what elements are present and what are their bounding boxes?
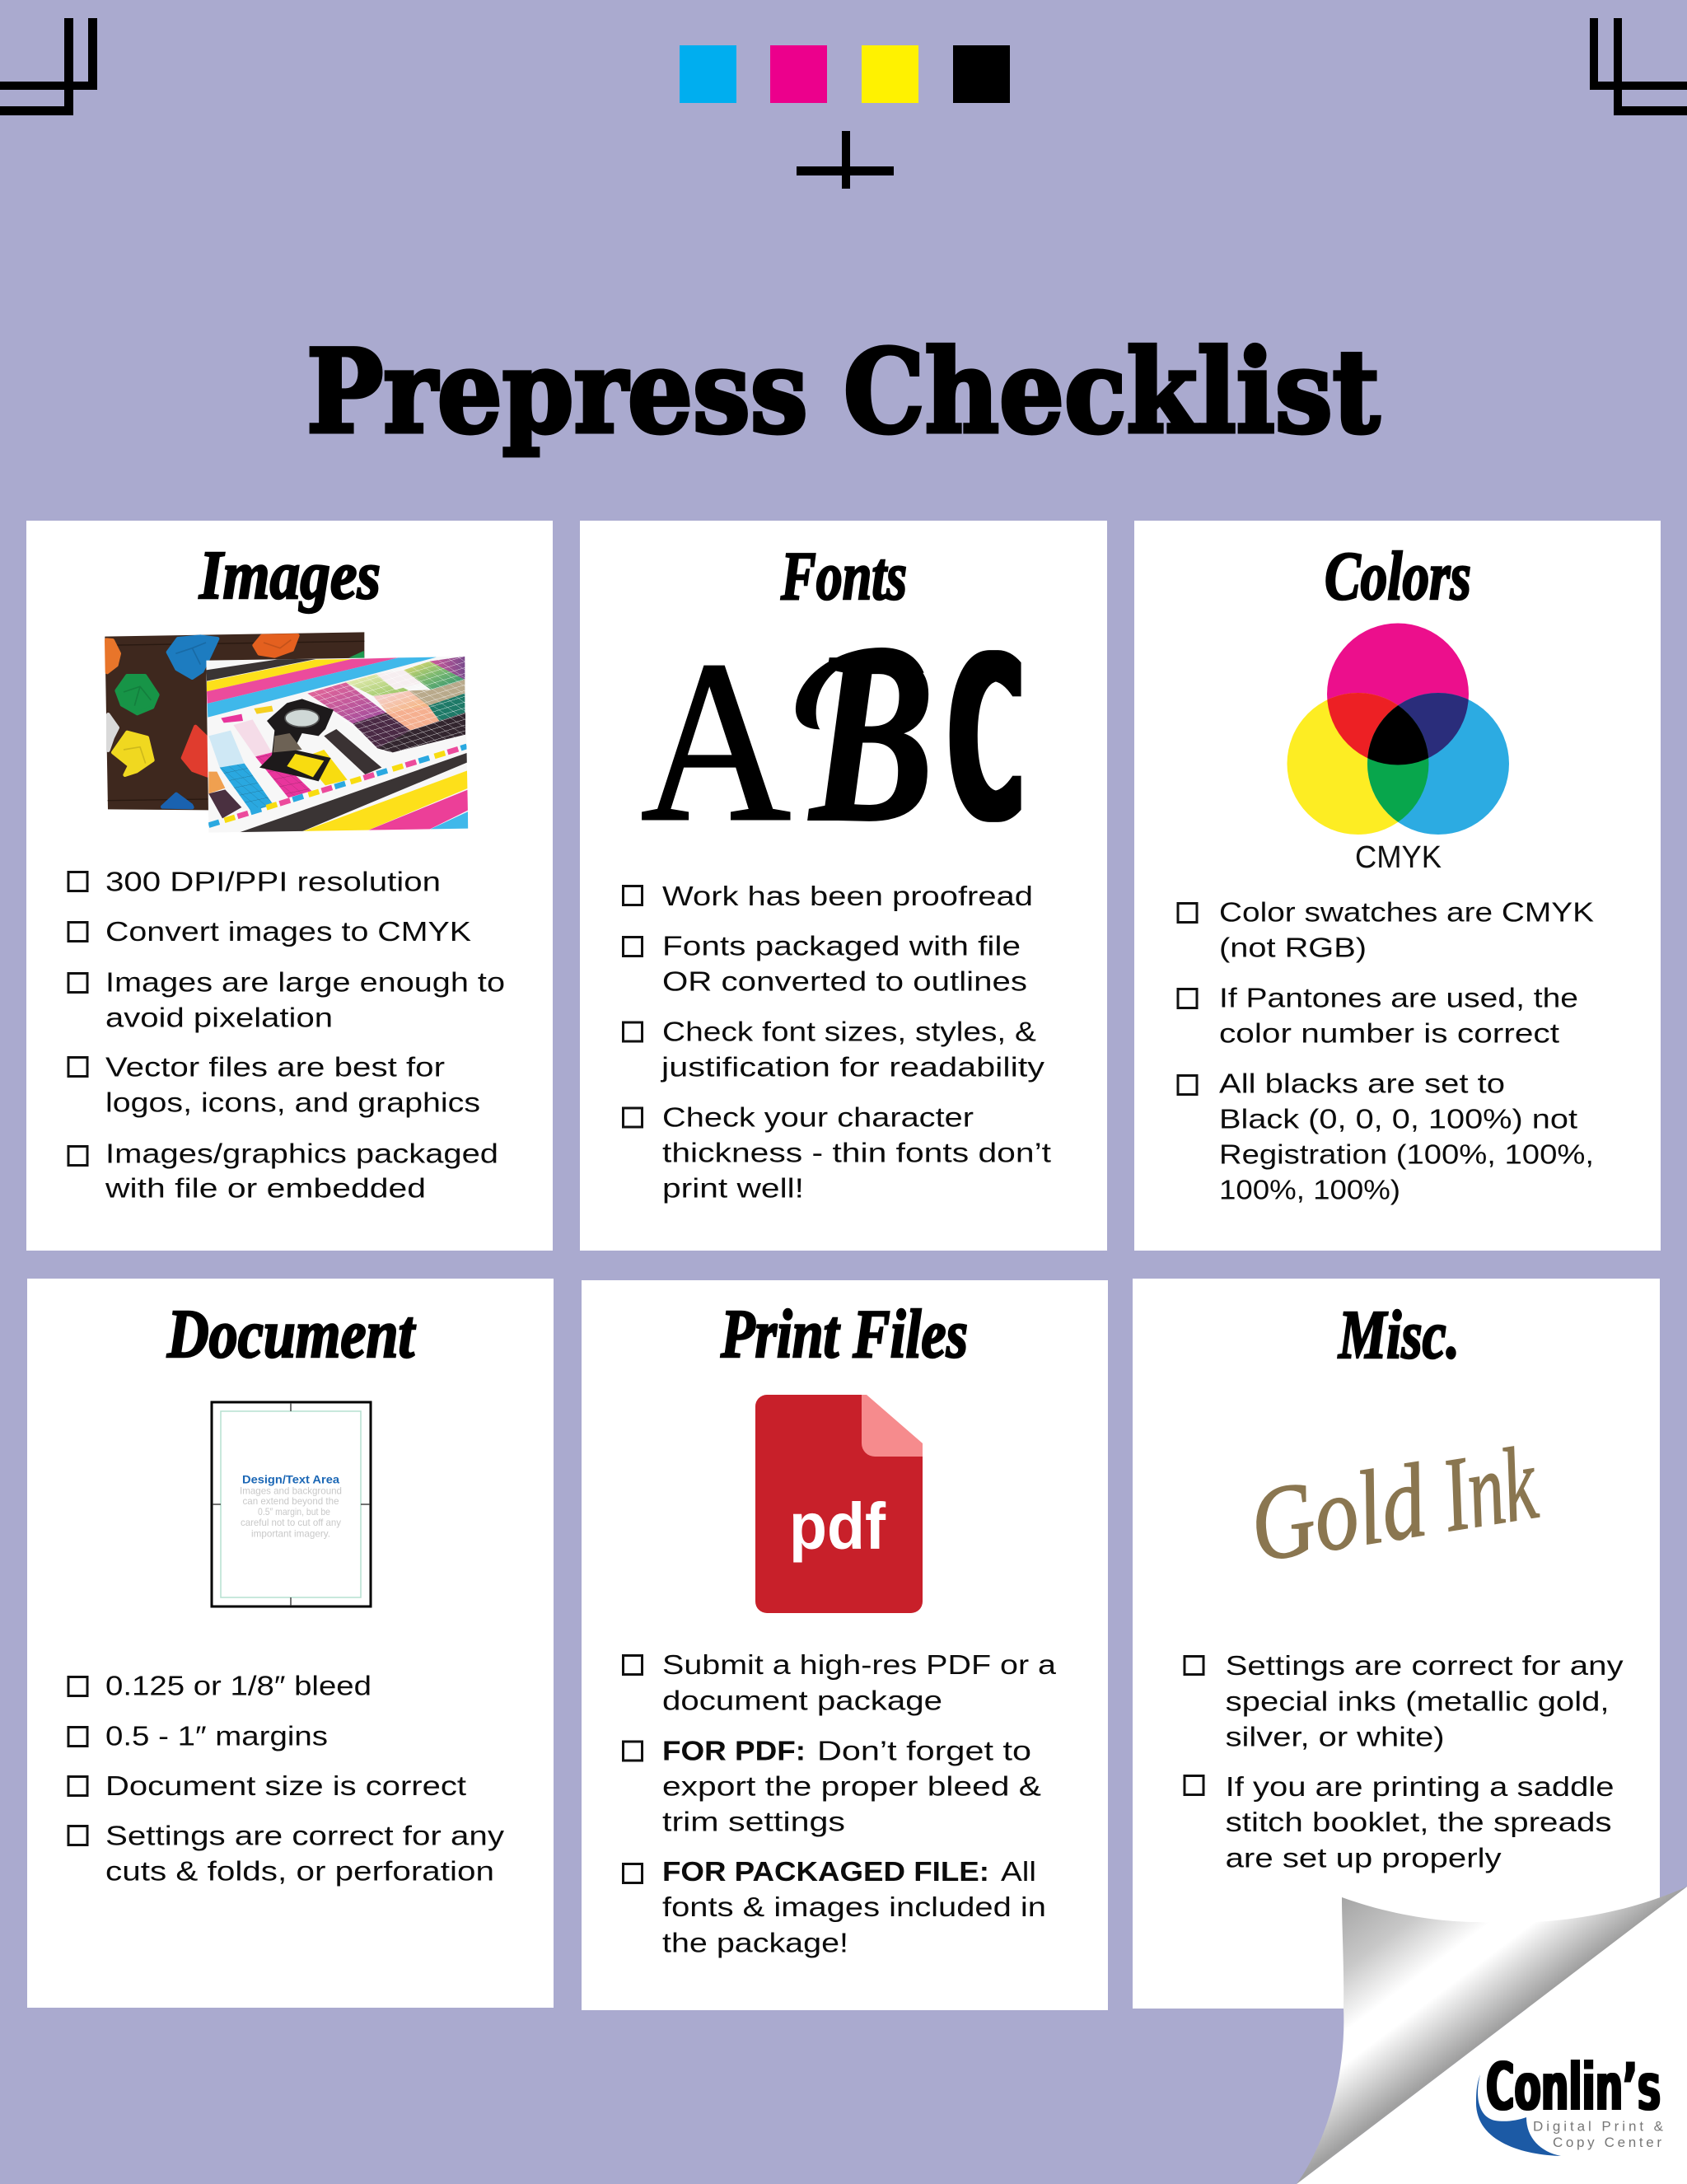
heading: misc: Misc. xyxy=(1337,1297,1460,1373)
checklist item: for packaged file: fonts & images included in xyxy=(662,1892,1046,1922)
logo: Conlin's xyxy=(1476,2049,1664,2156)
checklist item: margins: 0.5 - 1″ margins xyxy=(105,1720,328,1751)
panel: print files xyxy=(582,1280,1108,2010)
checklist item: cuts and folds: Settings are correct for any xyxy=(105,1821,505,1850)
document margin diagram: important imagery. xyxy=(251,1528,330,1540)
checklist item: character thickness: thickness - thin fonts don’t xyxy=(662,1137,1051,1168)
checklist item: fonts packaged: OR converted to outlines xyxy=(662,966,1027,997)
checklist item: character thickness xyxy=(623,1102,1051,1203)
checklist item: blacks: Black (0, 0, 0, 100%) not xyxy=(1219,1104,1577,1134)
checklist item: blacks: Registration (100%, 100%, xyxy=(1219,1139,1594,1170)
checklist item: pantones: color number is correct xyxy=(1219,1018,1559,1048)
checklist item: for packaged file xyxy=(623,1856,1046,1957)
checklist item: for pdf: trim settings xyxy=(662,1806,845,1837)
panel: document xyxy=(27,1279,554,2008)
checklist item: submit pdf xyxy=(623,1649,1057,1715)
checklist item: document size: Document size is correct xyxy=(105,1770,466,1801)
panel: images xyxy=(26,521,553,1251)
logo swoosh xyxy=(1476,2074,1561,2156)
checklist item: fonts packaged xyxy=(623,931,1027,997)
icon: pdf file xyxy=(755,1395,923,1613)
checklist item: for packaged file: FOR PACKAGED FILE: xyxy=(662,1856,989,1887)
heading: document: Document xyxy=(166,1296,416,1373)
ABC font sample: A xyxy=(641,613,791,869)
CMYK label: CMYK xyxy=(1355,840,1442,875)
panel: fonts: C xyxy=(949,609,1023,873)
checklist item: special inks: Settings are correct for any xyxy=(1226,1650,1624,1681)
checklist item: for packaged file: the package! xyxy=(662,1928,848,1957)
registration cross xyxy=(797,131,894,189)
document margin diagram: can extend beyond the xyxy=(242,1495,339,1507)
page curl with revealed corner xyxy=(1297,1887,1687,2184)
checklist item: pantones: If Pantones are used, the xyxy=(1219,982,1578,1013)
checklist item: convert to CMYK: Convert images to CMYK xyxy=(105,916,471,947)
CMYK venn diagram xyxy=(1287,623,1509,835)
heading: colors: Colors xyxy=(1325,538,1471,615)
checklist item: cuts and folds: cuts & folds, or perforation xyxy=(105,1855,494,1887)
checklist item: cuts and folds xyxy=(68,1821,505,1887)
checklist item: character thickness: Check your character xyxy=(662,1102,974,1132)
gold ink sample xyxy=(1242,1424,1545,1584)
loupe xyxy=(259,699,334,781)
checklist item: for pdf xyxy=(623,1735,1041,1837)
panel: misc xyxy=(1133,1279,1660,2009)
checklist item: character thickness: print well! xyxy=(662,1173,804,1203)
checklist item: blacks xyxy=(1178,1068,1594,1204)
checklist item: 300 DPI: 300 DPI/PPI resolution xyxy=(105,867,441,896)
checklist item: saddle stitch: stitch booklet, the spreads xyxy=(1226,1807,1612,1837)
checklist item: vector files xyxy=(68,1051,480,1117)
heading: print files: Print Files xyxy=(720,1296,968,1373)
checklist item: swatches: (not RGB) xyxy=(1219,933,1367,962)
checklist item: bleed: 0.125 or 1/8″ bleed xyxy=(105,1671,372,1700)
checklist item: packaged graphics xyxy=(68,1139,498,1203)
document margin diagram xyxy=(212,1402,371,1606)
document margin diagram: careful not to cut off any xyxy=(241,1517,341,1528)
document margin diagram: 0.5″ margin, but be xyxy=(258,1506,330,1518)
checklist item: for pdf: Don’t forget to xyxy=(817,1735,1031,1766)
CMYK colour swatches xyxy=(680,45,1010,103)
checklist item: proofread: Work has been proofread xyxy=(662,881,1033,911)
panel: colors xyxy=(1134,521,1661,1251)
checklist item: fonts packaged: Fonts packaged with file xyxy=(662,931,1021,961)
checklist item: for pdf: FOR PDF: xyxy=(662,1735,806,1766)
icon: pdf file: pdf xyxy=(789,1490,886,1563)
document margin diagram: Design/Text Area xyxy=(242,1473,339,1486)
checklist item: image size xyxy=(68,967,505,1033)
checklist item: saddle stitch: are set up properly xyxy=(1226,1842,1502,1873)
checklist item: saddle stitch xyxy=(1185,1771,1615,1873)
checklist item: blacks: 100%, 100%) xyxy=(1219,1175,1400,1204)
checklist item: submit pdf: document package xyxy=(662,1686,942,1715)
checklist item: image size: avoid pixelation xyxy=(105,1002,333,1033)
ABC font sample xyxy=(641,602,1023,873)
checklist item: font sizes xyxy=(623,1017,1045,1083)
logo: Conlin's: Copy Center xyxy=(1553,2135,1661,2150)
photos: crumpled paper and colour chart with loupe xyxy=(105,632,472,835)
checklist item: vector files: logos, icons, and graphics xyxy=(105,1087,480,1117)
checklist item: pantones xyxy=(1178,982,1578,1048)
checklist item: special inks xyxy=(1185,1650,1624,1751)
gold ink sample: Gold xyxy=(1242,1441,1434,1584)
checklist item: special inks: special inks (metallic gold, xyxy=(1226,1686,1610,1717)
heading: fonts: Fonts xyxy=(780,538,907,615)
panel: fonts xyxy=(580,521,1107,1251)
checklist item: saddle stitch: If you are printing a saddle xyxy=(1226,1771,1615,1802)
checklist item: packaged graphics: with file or embedded xyxy=(105,1173,426,1203)
checklist item: blacks: All blacks are set to xyxy=(1219,1068,1505,1099)
checklist item: packaged graphics: Images/graphics packaged xyxy=(105,1139,498,1168)
title: Prepress Checklist xyxy=(306,324,1380,459)
checklist item: image size: Images are large enough to xyxy=(105,967,505,997)
gold ink sample: Ink xyxy=(1434,1424,1545,1554)
ABC font sample: B xyxy=(807,602,934,872)
checklist item: for pdf: export the proper bleed & xyxy=(662,1771,1041,1801)
checklist item: swatches xyxy=(1178,896,1594,962)
crop marks: top left xyxy=(0,18,97,115)
checklist item: vector files: Vector files are best for xyxy=(105,1051,445,1083)
checklist item: special inks: silver, or white) xyxy=(1226,1722,1445,1751)
checklist item: swatches: Color swatches are CMYK xyxy=(1219,896,1594,928)
heading: images: Images xyxy=(199,537,381,614)
checklist item: for packaged file: All xyxy=(1001,1856,1036,1887)
crop marks: top right xyxy=(1590,18,1687,115)
logo tagline: Digital Print & xyxy=(1533,2119,1664,2135)
document margin diagram: Images and background xyxy=(240,1485,342,1496)
checklist item: font sizes: justification for readability xyxy=(661,1051,1045,1083)
checklist item: font sizes: Check font sizes, styles, & xyxy=(662,1017,1036,1046)
checklist item: submit pdf: Submit a high-res PDF or a xyxy=(662,1649,1057,1680)
